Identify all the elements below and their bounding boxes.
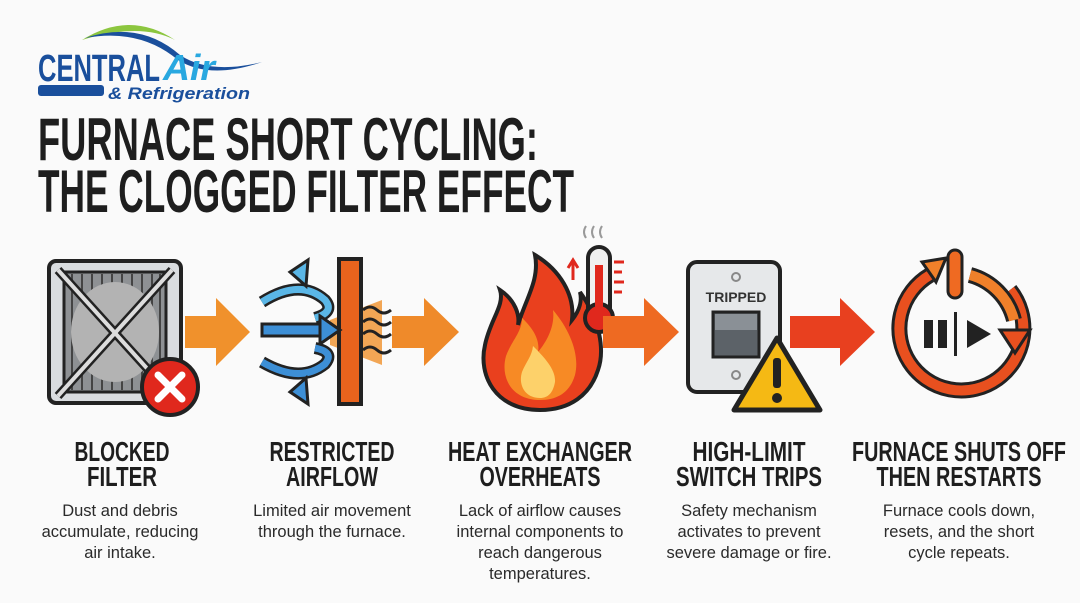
step 5 text: Furnace cools down,: [883, 502, 1035, 520]
logo: CENTRAL: [38, 48, 160, 90]
step 5 text: resets, and the short: [884, 523, 1035, 541]
logo: Air: [162, 47, 217, 88]
icon: thermometer: [568, 226, 624, 332]
step 4 text: HIGH-LIMIT: [692, 436, 806, 467]
step 3 text: Lack of airflow causes: [459, 502, 621, 520]
icon: warning triangle: [734, 338, 820, 410]
step 3 text: internal components to: [457, 523, 623, 541]
step 2 text: RESTRICTED: [270, 436, 394, 467]
step 5 text: [852, 436, 1066, 562]
logo: & Refrigeration: [108, 84, 250, 103]
title: THE CLOGGED FILTER EFFECT: [38, 158, 574, 225]
icon: clogged filter: [49, 261, 198, 415]
arrow 4: [790, 298, 875, 366]
arrow 1: [185, 298, 250, 366]
step 1 text: [42, 436, 198, 562]
step 4 text: activates to prevent: [677, 523, 821, 541]
step 3 text: [448, 436, 632, 583]
step 2 text: [253, 436, 411, 541]
title: FURNACE SHORT CYCLING:: [38, 106, 538, 173]
step 5 text: cycle repeats.: [908, 544, 1010, 562]
step 3 text: temperatures.: [489, 565, 591, 583]
step 2 text: AIRFLOW: [286, 461, 378, 492]
step 1 text: BLOCKED: [74, 436, 170, 467]
icon: red x: [142, 359, 198, 415]
step 3 text: OVERHEATS: [480, 461, 600, 492]
step 4 text: severe damage or fire.: [666, 544, 832, 562]
icon: restart cycle: [899, 250, 1030, 390]
step 1 text: accumulate, reducing: [42, 523, 198, 541]
icon: flame with thermometer: [483, 226, 624, 410]
arrow 3: [603, 298, 679, 366]
step 1 text: FILTER: [87, 461, 157, 492]
step 4 text: [666, 436, 832, 562]
step 4 text: SWITCH TRIPS: [676, 461, 822, 492]
step 1 text: Dust and debris: [62, 502, 178, 520]
step 3 text: reach dangerous: [478, 544, 602, 562]
step 1 text: air intake.: [84, 544, 156, 562]
icon: tripped switch: TRIPPED: [706, 289, 766, 305]
step 4 text: Safety mechanism: [681, 502, 817, 520]
icon: restricted airflow: [262, 259, 391, 404]
step 2 text: Limited air movement: [253, 502, 411, 520]
step 3 text: HEAT EXCHANGER: [448, 436, 632, 467]
step 2 text: through the furnace.: [258, 523, 406, 541]
arrow 2: [392, 298, 459, 366]
title: [38, 106, 574, 225]
icon: tripped switch: [688, 262, 820, 410]
logo: [38, 25, 262, 103]
